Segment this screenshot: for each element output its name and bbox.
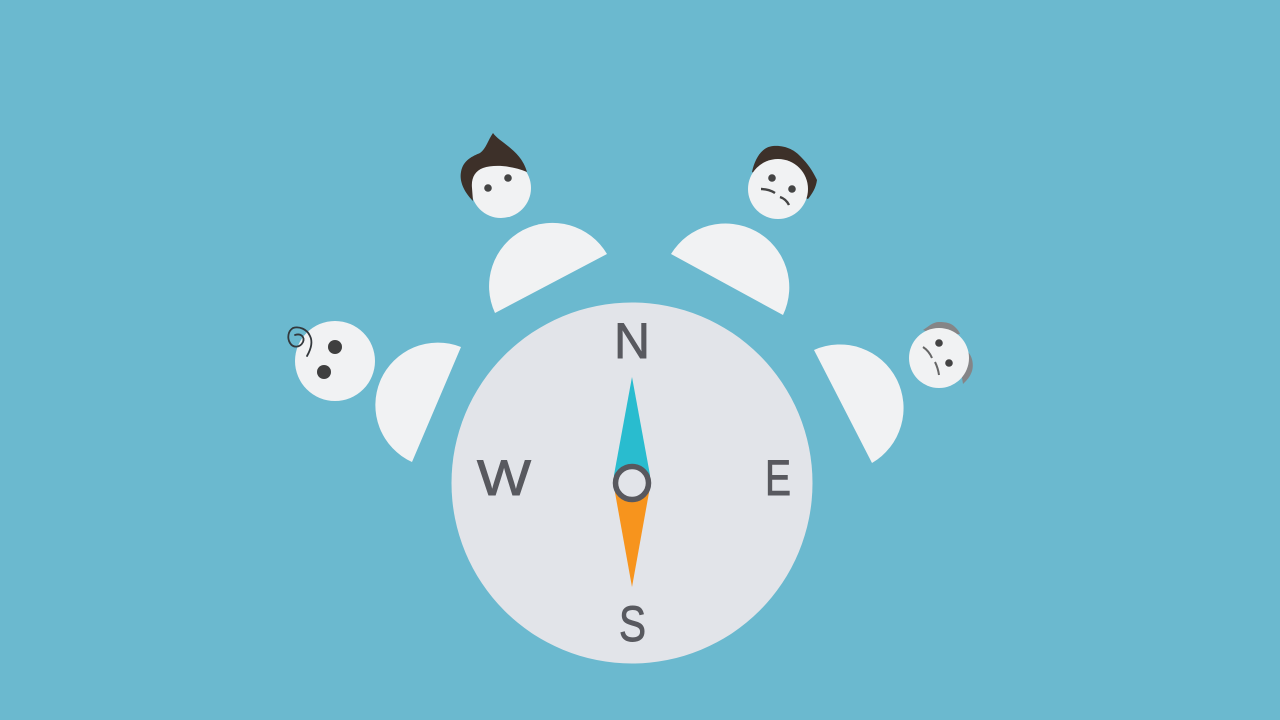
needle pivot ring — [616, 466, 648, 500]
needle: south — [614, 483, 650, 587]
left eyebrow — [923, 347, 932, 358]
right eye — [788, 185, 796, 193]
right eyebrow — [780, 197, 789, 205]
letter N: N — [614, 313, 650, 369]
needle: north — [614, 377, 650, 483]
lower eye — [317, 365, 331, 379]
compass dial — [452, 302, 812, 664]
hair: single curl — [288, 327, 311, 356]
character: right head — [909, 322, 973, 388]
character: top-right head — [748, 146, 817, 219]
hair: grey side — [960, 352, 973, 384]
face — [471, 158, 531, 218]
body: right semicircle — [814, 344, 904, 463]
left eye — [484, 184, 492, 192]
character: top-left head — [461, 133, 531, 218]
upper eye — [328, 340, 342, 354]
character: left head — [288, 321, 375, 401]
left eye — [768, 174, 776, 182]
letter S: S — [619, 596, 646, 652]
hair: dark short — [752, 146, 817, 199]
face — [748, 159, 808, 219]
body: left semicircle — [375, 343, 461, 462]
body: top-left semicircle — [489, 223, 607, 313]
upper eye — [935, 339, 943, 347]
hair: grey top — [923, 322, 960, 336]
right eyebrow — [935, 362, 939, 375]
face — [295, 321, 375, 401]
letter W: W — [477, 450, 532, 506]
face — [909, 328, 969, 388]
lower eye — [945, 359, 953, 367]
letter E: E — [765, 450, 791, 506]
compass — [452, 302, 812, 664]
hair: dark quiff — [461, 133, 527, 201]
right eye — [504, 174, 512, 182]
body: top-right semicircle — [671, 224, 789, 315]
left eyebrow — [761, 189, 775, 193]
